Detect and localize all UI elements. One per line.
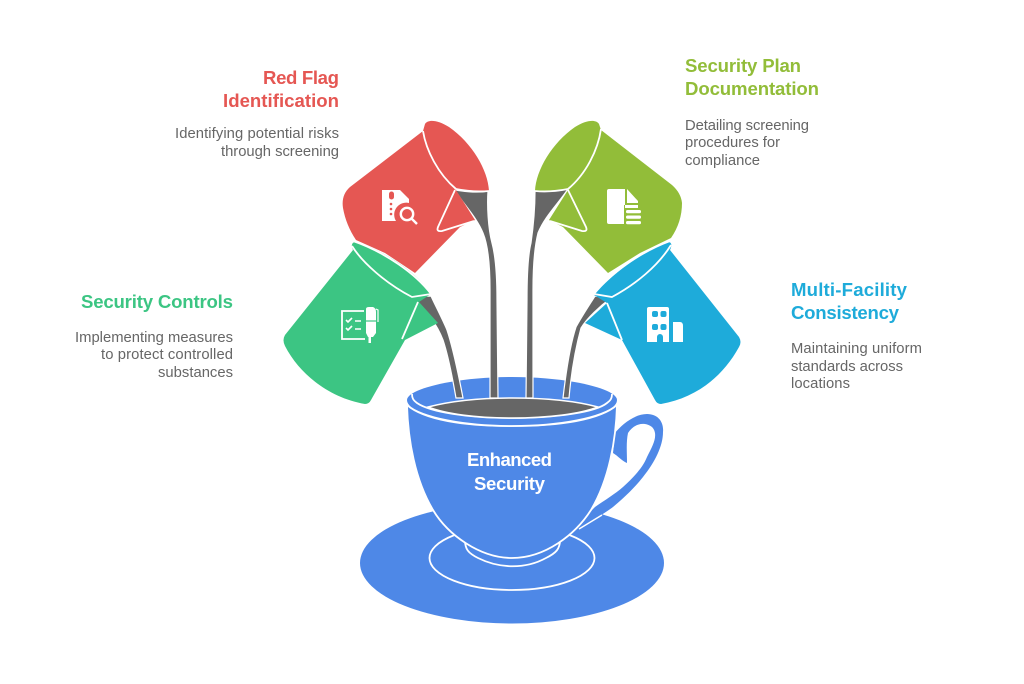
spout edge [607, 303, 622, 340]
label: red flag identification: Identification [223, 90, 339, 111]
label: security plan documentation: compliance [685, 153, 760, 169]
pour streams [413, 189, 611, 398]
icon: document search [382, 190, 417, 224]
cup foot [465, 540, 560, 566]
label: security plan documentation: Documentation [685, 78, 819, 99]
cup handle [580, 414, 663, 528]
mouth edge [352, 246, 431, 297]
stream: blue [563, 296, 611, 398]
label: security controls: Implementing measures [75, 330, 233, 346]
label: security plan documentation: Detailing screening [685, 118, 809, 134]
spout edge [438, 190, 474, 231]
label: security controls: to protect controlled [101, 347, 233, 363]
label: multi-facility consistency: Maintaining uniform [791, 341, 922, 357]
spout edge [550, 190, 586, 231]
pitcher: red [343, 121, 489, 273]
icon: buildings [647, 307, 683, 342]
label: red flag identification: Red Flag [263, 67, 339, 88]
label: security plan documentation [685, 55, 819, 169]
label: red flag identification: through screening [221, 144, 339, 160]
mouth edge [535, 129, 601, 191]
rim edge [594, 241, 670, 294]
spout edge [402, 302, 418, 339]
coffee surface [428, 398, 598, 418]
cup label: Security [474, 473, 546, 494]
icon: checklist and pen [342, 307, 378, 343]
label: multi-facility consistency: locations [791, 376, 850, 392]
label: multi-facility consistency [791, 279, 922, 392]
stream: red [455, 190, 498, 398]
label: security controls: substances [158, 365, 233, 381]
label: red flag identification: Identifying potential risks [175, 126, 339, 142]
icon: document list [607, 189, 641, 224]
label: multi-facility consistency: Consistency [791, 302, 900, 323]
rim edge [353, 241, 431, 294]
pitcher: blue [585, 241, 740, 404]
label: multi-facility consistency: standards across [791, 359, 903, 375]
label: security plan documentation: Security Plan [685, 55, 801, 76]
label: security controls [75, 291, 233, 381]
cup [407, 377, 663, 566]
stream: green [413, 296, 463, 398]
mouth edge [594, 245, 671, 297]
stream: olive [526, 189, 568, 398]
pitcher: green [284, 241, 438, 404]
label: security plan documentation: procedures for [685, 135, 780, 151]
label: red flag identification [175, 67, 339, 160]
mouth edge [423, 131, 489, 191]
label: security controls: Security Controls [81, 291, 233, 312]
cup body [407, 405, 617, 558]
saucer [360, 502, 664, 624]
cup label: Enhanced [467, 449, 552, 470]
pitcher: olive [535, 121, 682, 273]
label: multi-facility consistency: Multi-Facility [791, 279, 908, 300]
cup label [467, 449, 552, 494]
cup rim [407, 377, 617, 426]
